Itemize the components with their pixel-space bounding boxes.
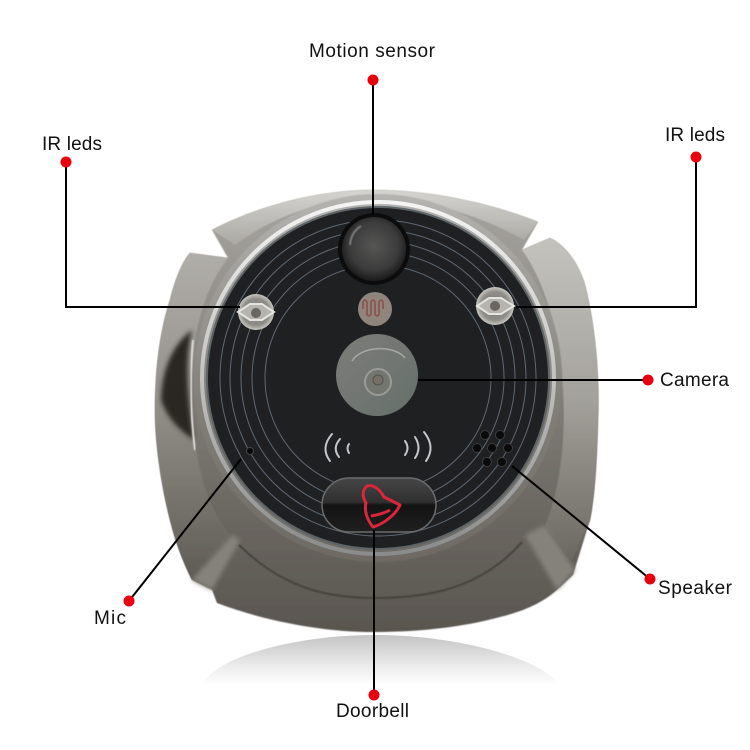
marker: IR leds right — [690, 152, 702, 162]
speaker holes — [472, 430, 512, 466]
device body — [155, 190, 598, 632]
label: motion sensor: Motion sensor — [309, 41, 436, 62]
left dark reflection — [161, 330, 194, 440]
doorbell button — [322, 478, 436, 532]
marker: mic — [124, 596, 134, 606]
right silver panel — [522, 238, 598, 560]
leader line: doorbell — [373, 530, 375, 695]
mic hole — [246, 448, 254, 454]
leader line: IR leds left — [66, 162, 240, 307]
bezel ring — [194, 194, 562, 562]
label: camera: Camera — [660, 370, 729, 391]
left IR led — [238, 294, 274, 330]
signal waves right — [405, 432, 431, 461]
floor reflection — [202, 635, 560, 686]
marker: motion sensor — [368, 74, 378, 86]
marker: doorbell — [368, 690, 380, 700]
black disc — [208, 208, 548, 548]
label: IR leds left: IR leds — [42, 134, 102, 155]
marker: IR leds left — [60, 156, 72, 168]
concentric rings — [220, 220, 536, 536]
label: mic: Mic — [94, 608, 126, 629]
bell icon — [363, 486, 400, 527]
leader line: IR leds right — [516, 157, 696, 307]
camera lens — [336, 334, 418, 416]
motion sensor dome — [338, 213, 410, 285]
left silver panel — [155, 253, 230, 580]
marker: camera — [642, 374, 654, 386]
right IR led — [476, 287, 514, 325]
leader line: camera — [418, 379, 648, 381]
leader line: motion sensor — [372, 80, 374, 215]
label: IR leds right: IR leds — [665, 125, 725, 146]
top tabs — [212, 190, 538, 245]
doorbell device — [155, 190, 598, 632]
left bright streak — [191, 340, 195, 450]
lower chamfers — [192, 535, 240, 590]
label: doorbell: Doorbell — [336, 701, 409, 722]
label: speaker: Speaker — [658, 578, 733, 599]
marker: speaker — [644, 574, 656, 584]
leader line: mic — [129, 459, 241, 601]
light sensor — [358, 292, 392, 326]
leader line: speaker — [512, 466, 650, 579]
signal waves left — [325, 434, 349, 461]
